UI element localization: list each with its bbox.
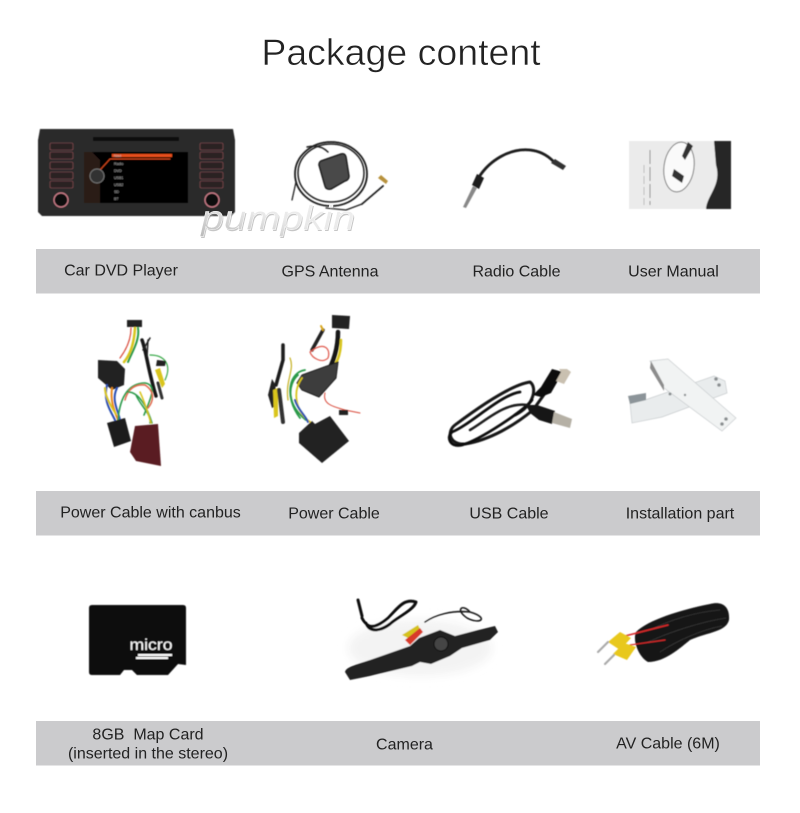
label bar: row 3 [36,721,760,766]
icon: GPS antenna [292,142,388,210]
label bar: row 2: USB Cable [469,506,549,522]
label bar: row 2: Power Cable [288,506,380,522]
label bar: row 3: 8GB Map Card [92,726,204,744]
screen: Navi [114,154,121,158]
label bar: row 3: Camera [376,736,433,754]
screen: DVD [114,169,122,173]
label bar: row 1: Car DVD Player [64,262,179,280]
label bar: row 3: AV Cable (6M) [616,736,720,752]
label bar: row 2 [36,491,760,536]
label bar: row 2: Power Cable with canbus [60,504,241,522]
label bar: row 1: User Manual [628,264,719,280]
screen: USB2 [114,183,123,187]
icon: user manual [629,140,731,209]
screen: BT [114,197,119,201]
label bar: row 1: Radio Cable [472,264,561,280]
title: Package content [261,31,541,73]
icon: Pumpkin watermark: pumpkin [200,200,355,238]
icon: power cable [268,315,360,463]
icon: micro SD map card [89,605,186,675]
screen [84,143,188,203]
icon: power cable with canbus [98,320,168,466]
screen: Radio [114,162,123,166]
icon: car DVD player [38,129,235,216]
icon: USB cable [449,369,572,446]
label bar: row 1 [36,249,760,294]
buttons [50,143,223,188]
label bar: row 2: Installation part [626,506,735,522]
icon: Pumpkin watermark: pumpkin [201,201,356,239]
screen: SD [114,190,119,194]
label bar: row 1: GPS Antenna [282,264,379,280]
icon: camera [345,600,498,680]
icon: installation part [628,359,736,431]
icon: radio cable [463,150,566,208]
icon: AV cable [598,603,729,664]
icon: micro SD map card: micro [130,637,173,654]
screen: USB1 [114,176,123,180]
label bar: row 3: (inserted in the stereo) [68,746,228,762]
